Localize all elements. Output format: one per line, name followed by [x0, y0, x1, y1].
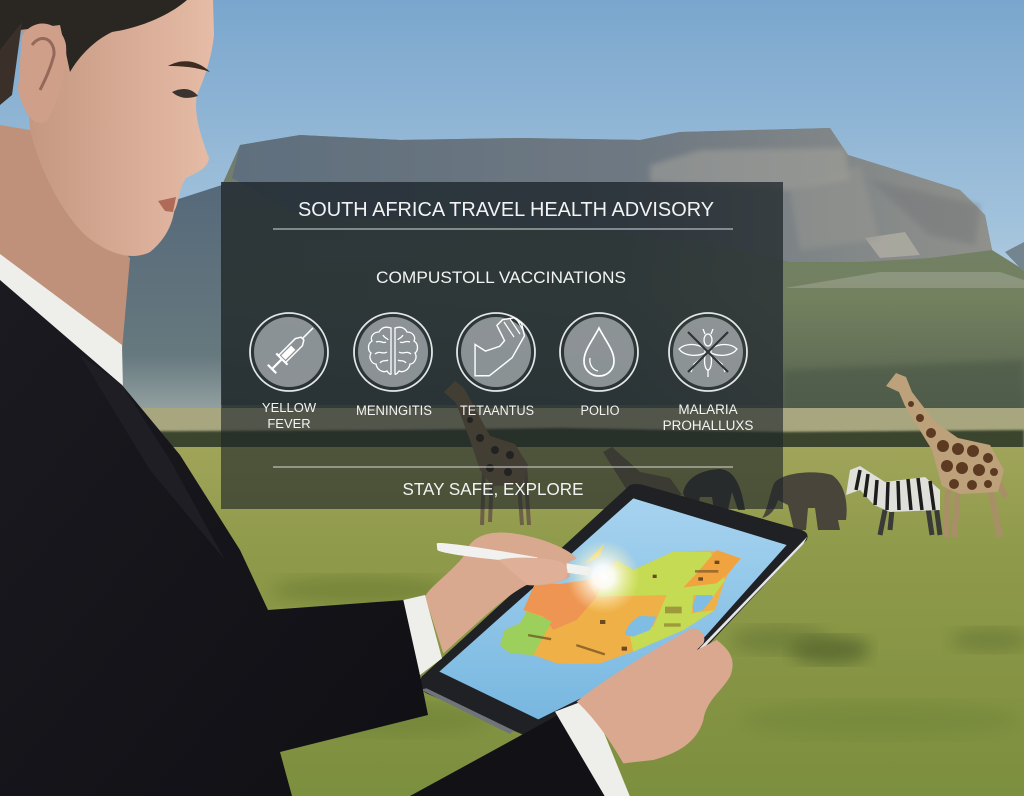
- map of South Africa: [500, 543, 741, 664]
- footer slogan: STAY SAFE, EXPLORE: [402, 479, 584, 499]
- elephant: right: [762, 472, 847, 530]
- left hand with stylus: [403, 533, 592, 675]
- label: malaria prophylaxis: MALARIA: [678, 402, 738, 417]
- tablet screen: [439, 498, 787, 719]
- giraffe: small centre: [603, 447, 682, 495]
- neck: [0, 125, 130, 350]
- right hand: [555, 629, 733, 796]
- label: malaria prophylaxis: PROHALLUXS: [663, 418, 753, 433]
- sky: [0, 0, 1024, 420]
- icon: crossed mosquito: [669, 313, 747, 391]
- icon: syringe: [250, 313, 328, 391]
- label: meningitis: MENINGITIS: [356, 403, 432, 418]
- label: yellow fever: YELLOW: [262, 400, 316, 415]
- label: yellow fever: FEVER: [267, 416, 311, 431]
- elephant: centre: [683, 469, 745, 510]
- glare: [567, 540, 640, 613]
- grass savanna: [0, 447, 1024, 796]
- tablet with map: [420, 484, 808, 737]
- tablet body: [420, 484, 808, 737]
- hair: [0, 0, 187, 72]
- collar: [0, 254, 123, 390]
- label: polio: POLIO: [580, 403, 620, 418]
- eye and brow: [168, 61, 210, 72]
- giraffe: foreground right: [886, 373, 1006, 537]
- icon: arm: [457, 313, 535, 391]
- lips: [158, 197, 176, 212]
- woman: [0, 0, 610, 796]
- mountain: Table Mountain: [50, 128, 1024, 412]
- stylus: [437, 543, 592, 576]
- title: SOUTH AFRICA TRAVEL HEALTH ADVISORY: [298, 199, 714, 221]
- distant field: [0, 408, 1024, 440]
- face: [20, 0, 214, 256]
- zebra: [846, 466, 940, 535]
- jacket: [0, 280, 428, 796]
- ear: [18, 23, 66, 123]
- heading: vaccinations: COMPUSTOLL VACCINATIONS: [376, 268, 626, 287]
- panel: advisory: [221, 182, 783, 509]
- icon: water drop: [560, 313, 638, 391]
- tree line: [0, 428, 1024, 452]
- giraffe: behind panel: [444, 381, 529, 525]
- right sleeve: [410, 714, 610, 796]
- icon: brain: [354, 313, 432, 391]
- label: tetanus: TETAANTUS: [460, 403, 534, 418]
